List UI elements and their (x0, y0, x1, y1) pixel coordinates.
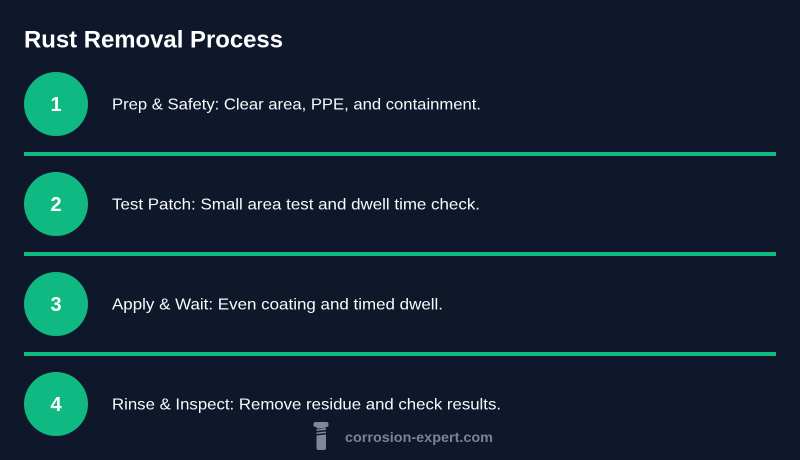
step 2 text: Test Patch: Small area test and dwell time check. (112, 196, 480, 214)
step 2 number badge (24, 172, 88, 236)
step 3 text: Apply & Wait: Even coating and timed dwell. (112, 296, 443, 314)
step 1 number badge: 1 (50, 94, 62, 116)
step 3 number badge (24, 272, 88, 336)
step 1 text: Prep & Safety: Clear area, PPE, and containment. (112, 96, 481, 114)
step 1 number badge (24, 72, 88, 136)
step 4 text: Rinse & Inspect: Remove residue and check results. (112, 396, 501, 414)
watermark (314, 422, 493, 450)
step 3 number badge: 3 (50, 294, 62, 316)
step 2 number badge: 2 (50, 194, 62, 216)
title: Rust Removal Process (24, 26, 283, 54)
step 4 number badge (24, 372, 88, 436)
icon: bolt (314, 422, 328, 450)
step 4 number badge: 4 (50, 394, 62, 416)
step 4 (24, 372, 501, 436)
watermark text: corrosion-expert.com (345, 429, 493, 445)
step 2 (24, 172, 480, 236)
step 1 (24, 72, 481, 136)
step 3 (24, 272, 443, 336)
